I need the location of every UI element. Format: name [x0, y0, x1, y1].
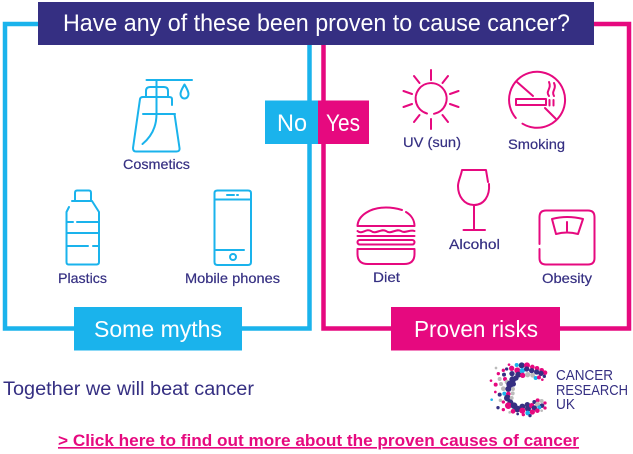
logo wordmark: CANCER — [556, 368, 613, 384]
badge: Some myths — [74, 307, 242, 350]
logo mark: dotted C — [490, 362, 547, 417]
badge: No — [265, 100, 318, 144]
label: Alcohol: Alcohol — [449, 236, 500, 252]
label: UV (sun): UV (sun) — [403, 134, 461, 150]
icon: burger — [358, 208, 414, 264]
label: Smoking: Smoking — [508, 136, 565, 152]
tagline: Together we will beat cancer — [3, 379, 255, 400]
logo: Cancer Research UK — [490, 362, 628, 417]
icon: plastic bottle — [66, 190, 99, 264]
icon: no smoking — [509, 72, 565, 128]
badge: Proven risks — [391, 307, 560, 350]
badge: Yes: Yes — [326, 110, 360, 137]
icon: wine glass — [458, 170, 489, 230]
icon: mobile phone — [214, 190, 251, 265]
label: Diet: Diet — [373, 269, 400, 285]
badge: Some myths: Some myths — [94, 316, 222, 342]
label: Plastics: Plastics — [58, 270, 107, 286]
title — [38, 2, 594, 45]
link: find out more: > Click here to find out more about the proven causes of cancer — [58, 432, 580, 450]
logo wordmark: UK — [556, 397, 575, 413]
badge: Yes — [318, 100, 369, 144]
icon: sun — [404, 70, 458, 129]
badge: Proven risks: Proven risks — [414, 316, 538, 342]
logo wordmark — [556, 368, 628, 413]
label: Cosmetics: Cosmetics — [123, 156, 190, 172]
icon: weighing scale — [540, 210, 594, 264]
panel: myths frame — [5, 24, 310, 328]
panel: proven risks frame — [324, 24, 629, 328]
badge: No: No — [277, 110, 307, 137]
label: Obesity: Obesity — [542, 270, 592, 286]
title: Have any of these been proven to cause cancer? — [63, 10, 570, 37]
icon: cosmetics bottle — [133, 80, 192, 152]
label: Mobile phones: Mobile phones — [185, 270, 280, 286]
